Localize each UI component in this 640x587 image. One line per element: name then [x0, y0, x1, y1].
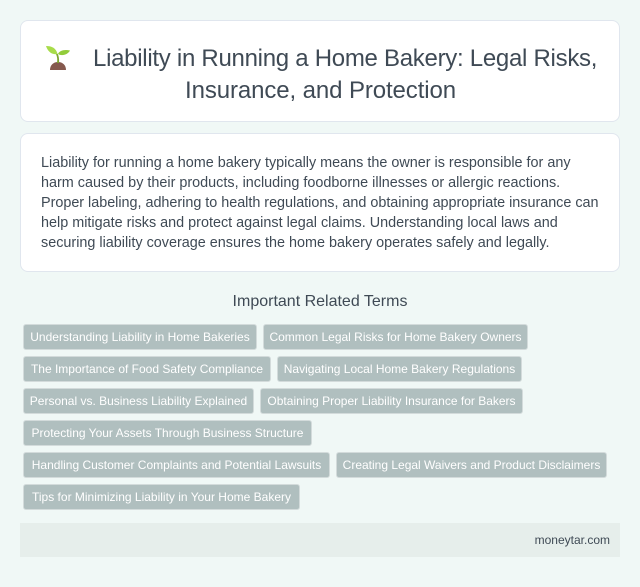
tag: Creating Legal Waivers and Product Disclaimers	[343, 458, 600, 472]
title: Insurance, and Protection	[185, 77, 456, 104]
tag: Common Legal Risks for Home Bakery Owners	[269, 330, 522, 344]
intro panel	[20, 133, 620, 272]
intro text: harm caused by their products, including foodborne illnesses or allergic reactions.	[41, 175, 560, 191]
header panel	[20, 20, 620, 122]
tag: Tips for Minimizing Liability in Your Home Bakery	[32, 490, 291, 504]
tag: Personal vs. Business Liability Explained	[30, 394, 247, 408]
related terms heading: Important Related Terms	[233, 293, 407, 310]
tag	[23, 452, 330, 478]
tag: Navigating Local Home Bakery Regulations	[284, 362, 515, 376]
tag	[23, 484, 300, 510]
tag	[263, 324, 528, 350]
tag	[23, 420, 312, 446]
icon: seedling	[46, 46, 70, 70]
title: Liability in Running a Home Bakery: Legal Risks,	[93, 45, 597, 72]
footer source: moneytar.com	[535, 533, 610, 547]
tag	[23, 324, 257, 350]
intro text: securing liability coverage ensures the home bakery operates safely and legally.	[41, 235, 550, 251]
tag: The Importance of Food Safety Compliance	[31, 362, 263, 376]
tag	[23, 356, 271, 382]
intro text: help mitigate risks and protect against legal claims. Understanding local laws and	[41, 215, 558, 231]
tags group	[23, 324, 607, 510]
tag: Protecting Your Assets Through Business Structure	[32, 426, 303, 440]
tag: Understanding Liability in Home Bakeries	[30, 330, 250, 344]
intro text: Proper labeling, adhering to health regulations, and obtaining appropriate insurance can	[41, 195, 598, 211]
tag	[260, 388, 523, 414]
tag: Obtaining Proper Liability Insurance for Bakers	[267, 394, 516, 408]
footer bar	[20, 523, 620, 557]
intro text: Liability for running a home bakery typically means the owner is responsible for any	[41, 155, 571, 171]
intro text	[41, 155, 598, 251]
title	[93, 45, 597, 104]
tag	[277, 356, 522, 382]
tag	[23, 388, 254, 414]
tag	[336, 452, 607, 478]
tag: Handling Customer Complaints and Potential Lawsuits	[32, 458, 321, 472]
